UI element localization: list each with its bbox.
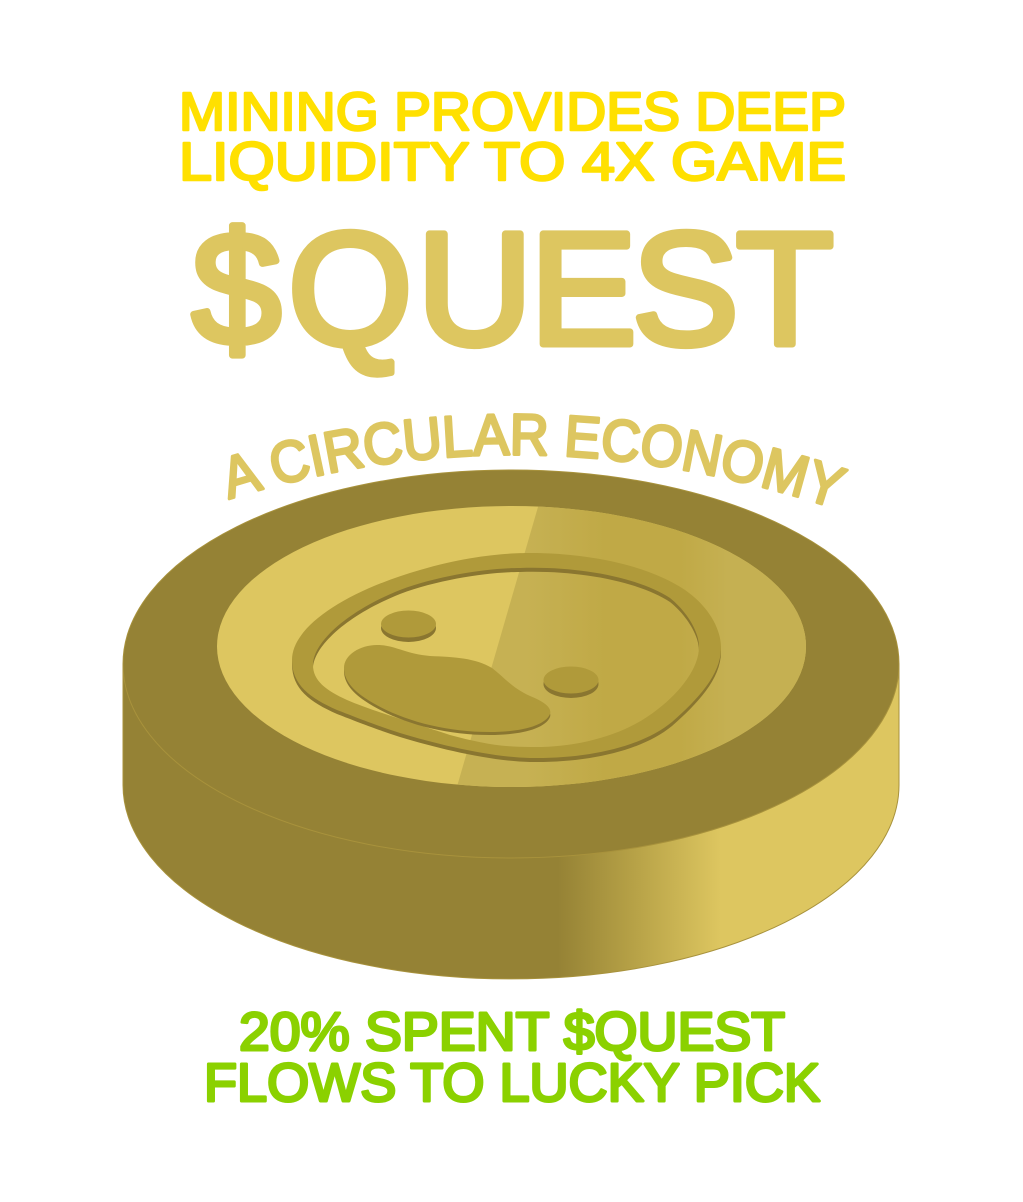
heading: mining provides deep liquidity: MINING PROVIDES DEEP bbox=[179, 82, 846, 142]
infographic canvas bbox=[122, 91, 900, 1103]
curved heading: a circular economy: A CIRCULAR ECONOMY bbox=[228, 413, 849, 506]
smiley emblem bbox=[292, 553, 721, 762]
footer: 20% spent $QUEST flows to lucky pick bbox=[204, 1002, 820, 1113]
emblem ring bbox=[292, 553, 721, 762]
title: $QUEST: $ bbox=[192, 199, 281, 378]
title: $QUEST: S bbox=[632, 199, 739, 378]
footer: 20% spent $QUEST flows to lucky pick: 20% SPENT $QUEST bbox=[239, 1002, 785, 1062]
footer: 20% spent $QUEST flows to lucky pick: FLOWS TO LUCKY PICK bbox=[204, 1053, 820, 1113]
coin illustration bbox=[123, 470, 899, 979]
heading: mining provides deep liquidity bbox=[179, 82, 846, 192]
title: $QUEST: U bbox=[417, 199, 533, 378]
title: $QUEST: Q bbox=[288, 199, 412, 378]
title: $QUEST: T bbox=[736, 199, 834, 378]
emblem left eye bbox=[381, 610, 436, 642]
title: $QUEST bbox=[192, 199, 834, 378]
coin side wall bbox=[123, 664, 899, 979]
emblem mouth blob bbox=[344, 645, 550, 735]
title: $QUEST: E bbox=[530, 199, 637, 378]
heading: mining provides deep liquidity: LIQUIDITY TO 4X GAME bbox=[179, 132, 846, 192]
emblem right eye bbox=[544, 666, 598, 698]
coin inner face bbox=[217, 500, 820, 790]
coin top face rim bbox=[123, 470, 899, 858]
